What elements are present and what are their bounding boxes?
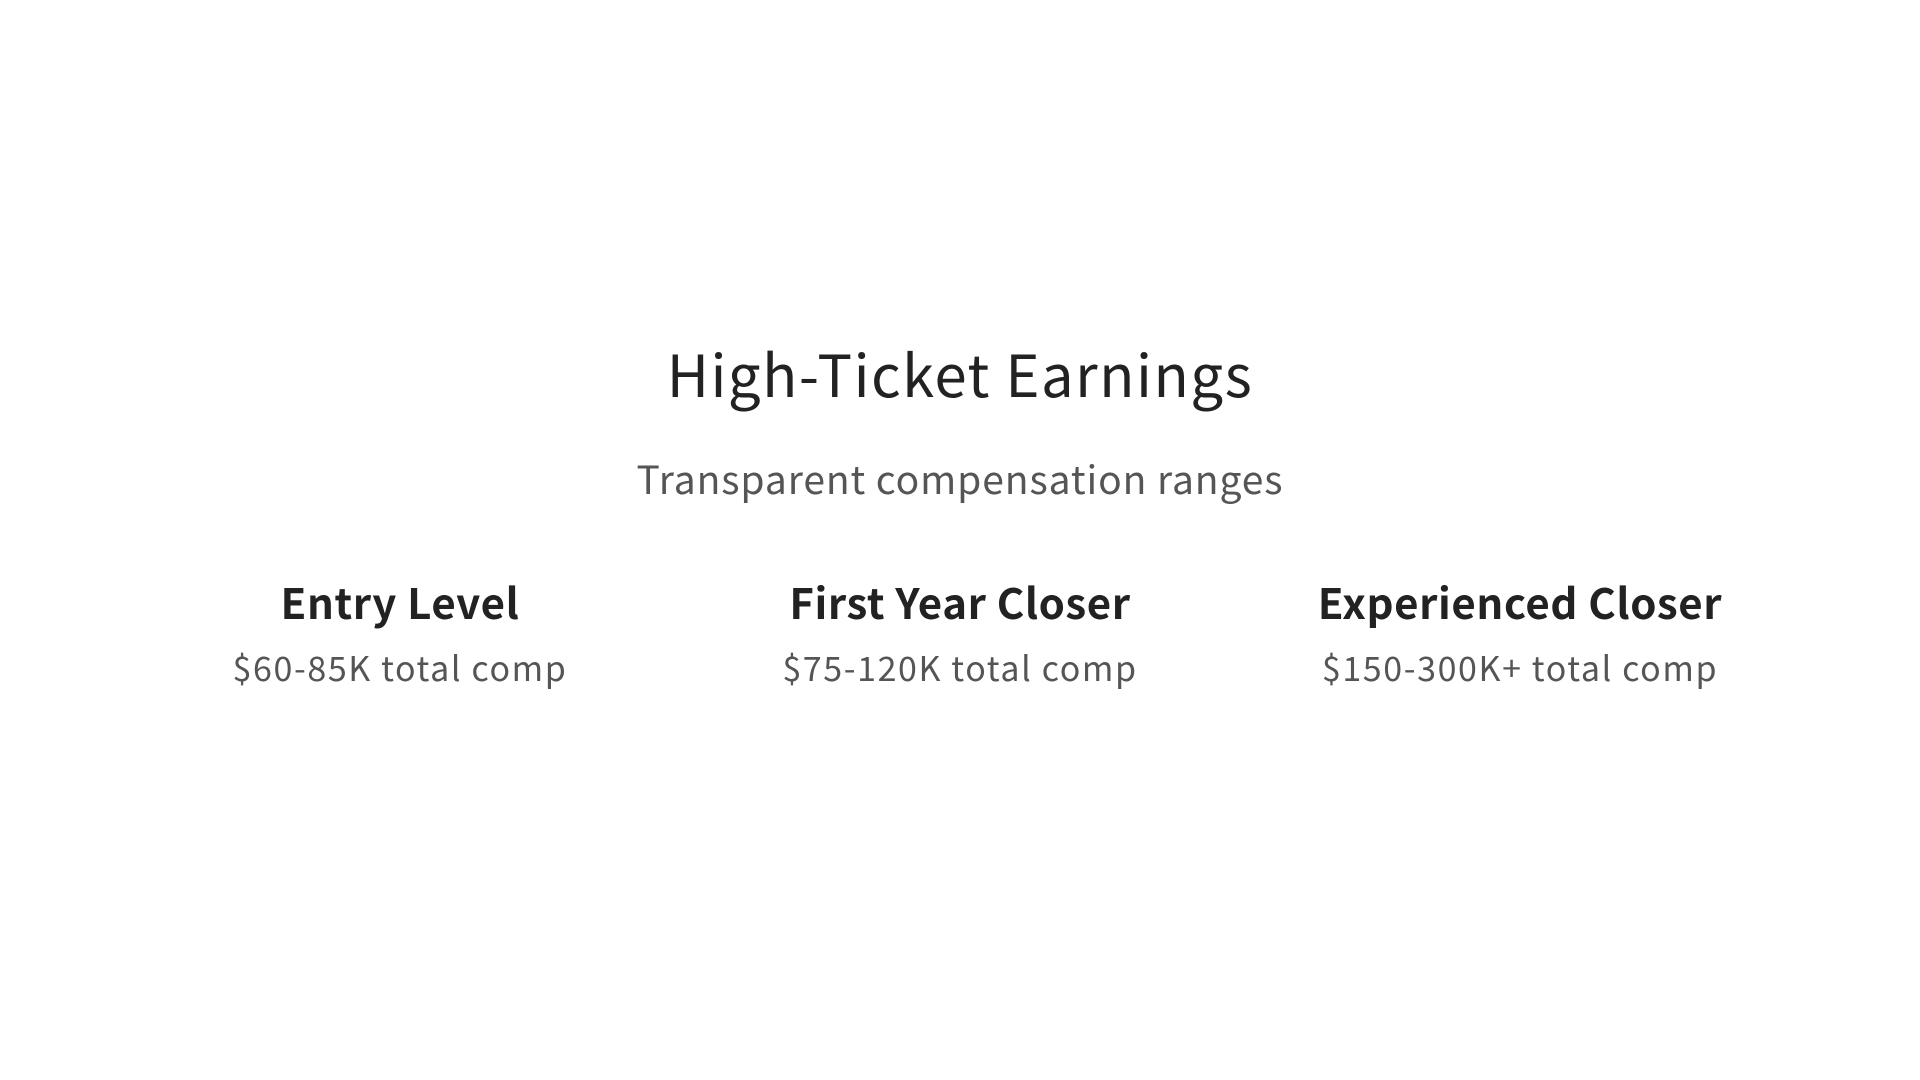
column: experienced closer — [1318, 571, 1722, 691]
heading: first year closer: First Year Closer — [789, 571, 1131, 632]
title: High-Ticket Earnings — [667, 330, 1253, 414]
value: entry level: $60-85K total comp — [233, 642, 567, 691]
value: first year closer: $75-120K total comp — [782, 642, 1138, 691]
heading: experienced closer: Experienced Closer — [1318, 571, 1722, 632]
heading: entry level: Entry Level — [281, 571, 519, 632]
value: experienced closer: $150-300K+ total comp — [1322, 642, 1718, 691]
column: first year closer — [782, 571, 1138, 691]
column: entry level — [233, 571, 567, 691]
subtitle: Transparent compensation ranges — [637, 450, 1283, 506]
